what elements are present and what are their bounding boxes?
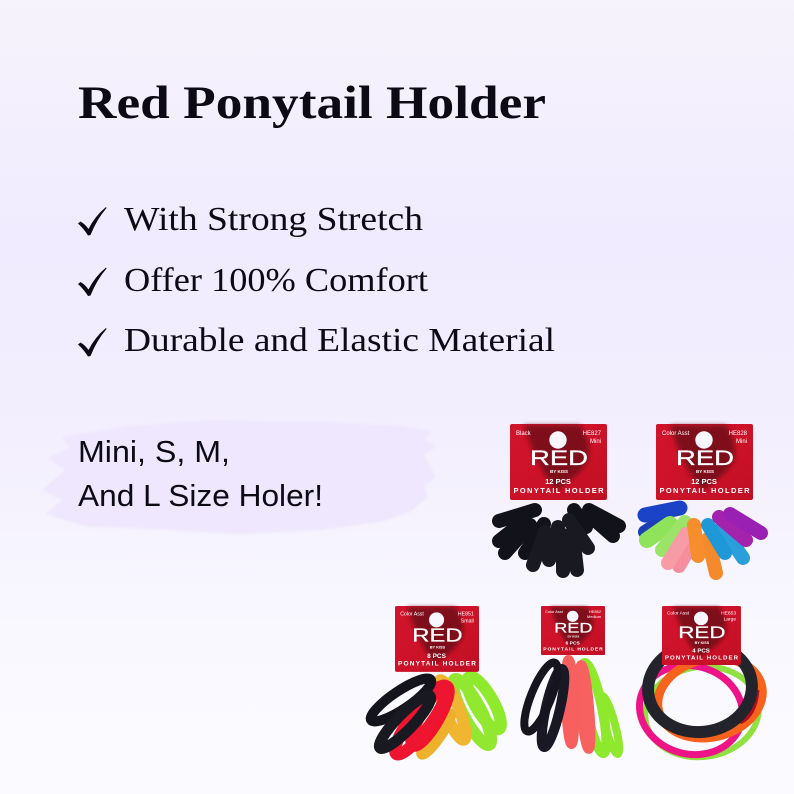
card: medium: HE852 bbox=[589, 609, 601, 614]
icon: check mark 3 bbox=[78, 328, 106, 356]
card: medium: Medium bbox=[587, 614, 601, 619]
hair ties: small bbox=[366, 672, 507, 760]
card: color assortment: HE828 bbox=[729, 431, 748, 437]
card: color assortment: Mini bbox=[736, 439, 747, 445]
product: large 4 pcs bbox=[629, 606, 771, 766]
feature list bbox=[78, 201, 555, 359]
feature: comfort: Offer 100% Comfort bbox=[124, 262, 429, 299]
brush stroke background bbox=[42, 420, 436, 534]
card: black: BY KISS bbox=[550, 469, 568, 474]
icon: check mark 1 bbox=[78, 207, 106, 236]
card: black: Mini bbox=[590, 439, 601, 445]
size callout with brush stroke: And L Size Holer! bbox=[78, 478, 323, 513]
card: large: BY KISS bbox=[695, 641, 710, 645]
card: small: Color Asst bbox=[400, 612, 424, 618]
size callout with brush stroke bbox=[42, 420, 436, 534]
feature: durable material: Durable and Elastic Material bbox=[124, 322, 555, 359]
card: small: HE851 bbox=[458, 612, 474, 618]
card: black: PONYTAIL HOLDER bbox=[514, 486, 604, 495]
card: color assortment bbox=[656, 424, 753, 500]
card: small bbox=[395, 606, 479, 672]
card: color assortment: RED bbox=[676, 447, 734, 470]
card: medium: Color Asst bbox=[545, 609, 564, 614]
card: black: HE827 bbox=[583, 431, 602, 437]
card: large bbox=[662, 606, 741, 665]
card: small: RED bbox=[412, 626, 463, 646]
card: color assortment: PONYTAIL HOLDER bbox=[660, 486, 750, 495]
card: medium: RED bbox=[554, 621, 593, 635]
card: color assortment: Color Asst bbox=[662, 431, 690, 437]
product: medium 6 pcs bbox=[518, 606, 623, 755]
card: black: Black bbox=[516, 431, 532, 437]
hair ties: black bbox=[499, 510, 619, 571]
hair ties: assorted colors bbox=[645, 508, 761, 573]
card: small: Small bbox=[461, 618, 474, 624]
card: large: PONYTAIL HOLDER bbox=[665, 656, 739, 661]
card: large: HE853 bbox=[721, 611, 736, 616]
card: medium: PONYTAIL HOLDER bbox=[543, 647, 603, 652]
card: medium: BY KISS bbox=[567, 635, 579, 639]
title: Red Ponytail Holder bbox=[78, 77, 546, 129]
card: medium bbox=[541, 606, 605, 655]
hair ties: medium bbox=[518, 659, 623, 755]
product: small 8 pcs bbox=[366, 606, 507, 760]
product: color assortment mini 12 pcs bbox=[645, 424, 761, 573]
hair ties: large bbox=[629, 639, 771, 766]
card: small: PONYTAIL HOLDER bbox=[398, 661, 476, 668]
callout text: Mini, S, M, bbox=[78, 434, 230, 469]
card: large: RED bbox=[678, 623, 725, 642]
icon: check mark 2 bbox=[78, 268, 106, 296]
feature: strong stretch: With Strong Stretch bbox=[124, 201, 423, 238]
card: small: 8 PCS bbox=[427, 653, 447, 660]
card: small: BY KISS bbox=[430, 644, 446, 649]
card: medium: 6 PCS bbox=[566, 641, 581, 647]
card: color assortment: 12 PCS bbox=[691, 477, 717, 486]
product: black mini 12 pcs bbox=[499, 424, 619, 571]
card: black: RED bbox=[530, 447, 588, 470]
card: black: 12 PCS bbox=[545, 477, 571, 486]
card: color assortment: BY KISS bbox=[696, 469, 714, 474]
card: large: 4 PCS bbox=[692, 649, 710, 655]
card: large: Color Asst bbox=[667, 611, 690, 616]
card: black bbox=[510, 424, 607, 500]
card: large: Large bbox=[724, 617, 736, 623]
